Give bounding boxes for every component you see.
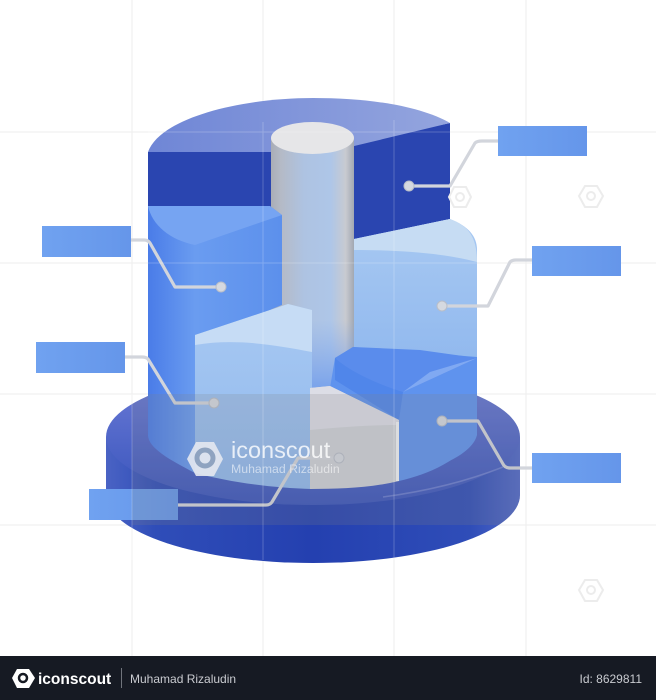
label boxes bbox=[36, 126, 621, 520]
watermark logo and credit: iconscout bbox=[231, 437, 331, 463]
faint grid overlay bbox=[132, 120, 477, 560]
base platform bbox=[106, 369, 520, 563]
top navy segment bbox=[148, 98, 450, 240]
watermark band bbox=[132, 394, 526, 525]
right light segment bbox=[354, 219, 477, 370]
connector wires and end dots bbox=[125, 141, 532, 505]
watermark logo and credit: Muhamad Rizaludin bbox=[231, 462, 340, 476]
grey segment bbox=[310, 386, 399, 489]
footer bar: Id: 8629811 bbox=[579, 672, 642, 686]
footer bar: Muhamad Rizaludin bbox=[130, 672, 236, 686]
footer bar bbox=[0, 656, 656, 700]
central metal pillar bbox=[271, 122, 354, 390]
footer bar: iconscout bbox=[38, 671, 111, 688]
small watermark icons bbox=[449, 186, 603, 601]
watermark logo and credit bbox=[187, 437, 340, 476]
cylinder backdrop bbox=[148, 300, 477, 485]
right blue segment bbox=[330, 347, 477, 481]
light block segment bbox=[195, 304, 312, 489]
left blue segment bbox=[148, 206, 282, 473]
